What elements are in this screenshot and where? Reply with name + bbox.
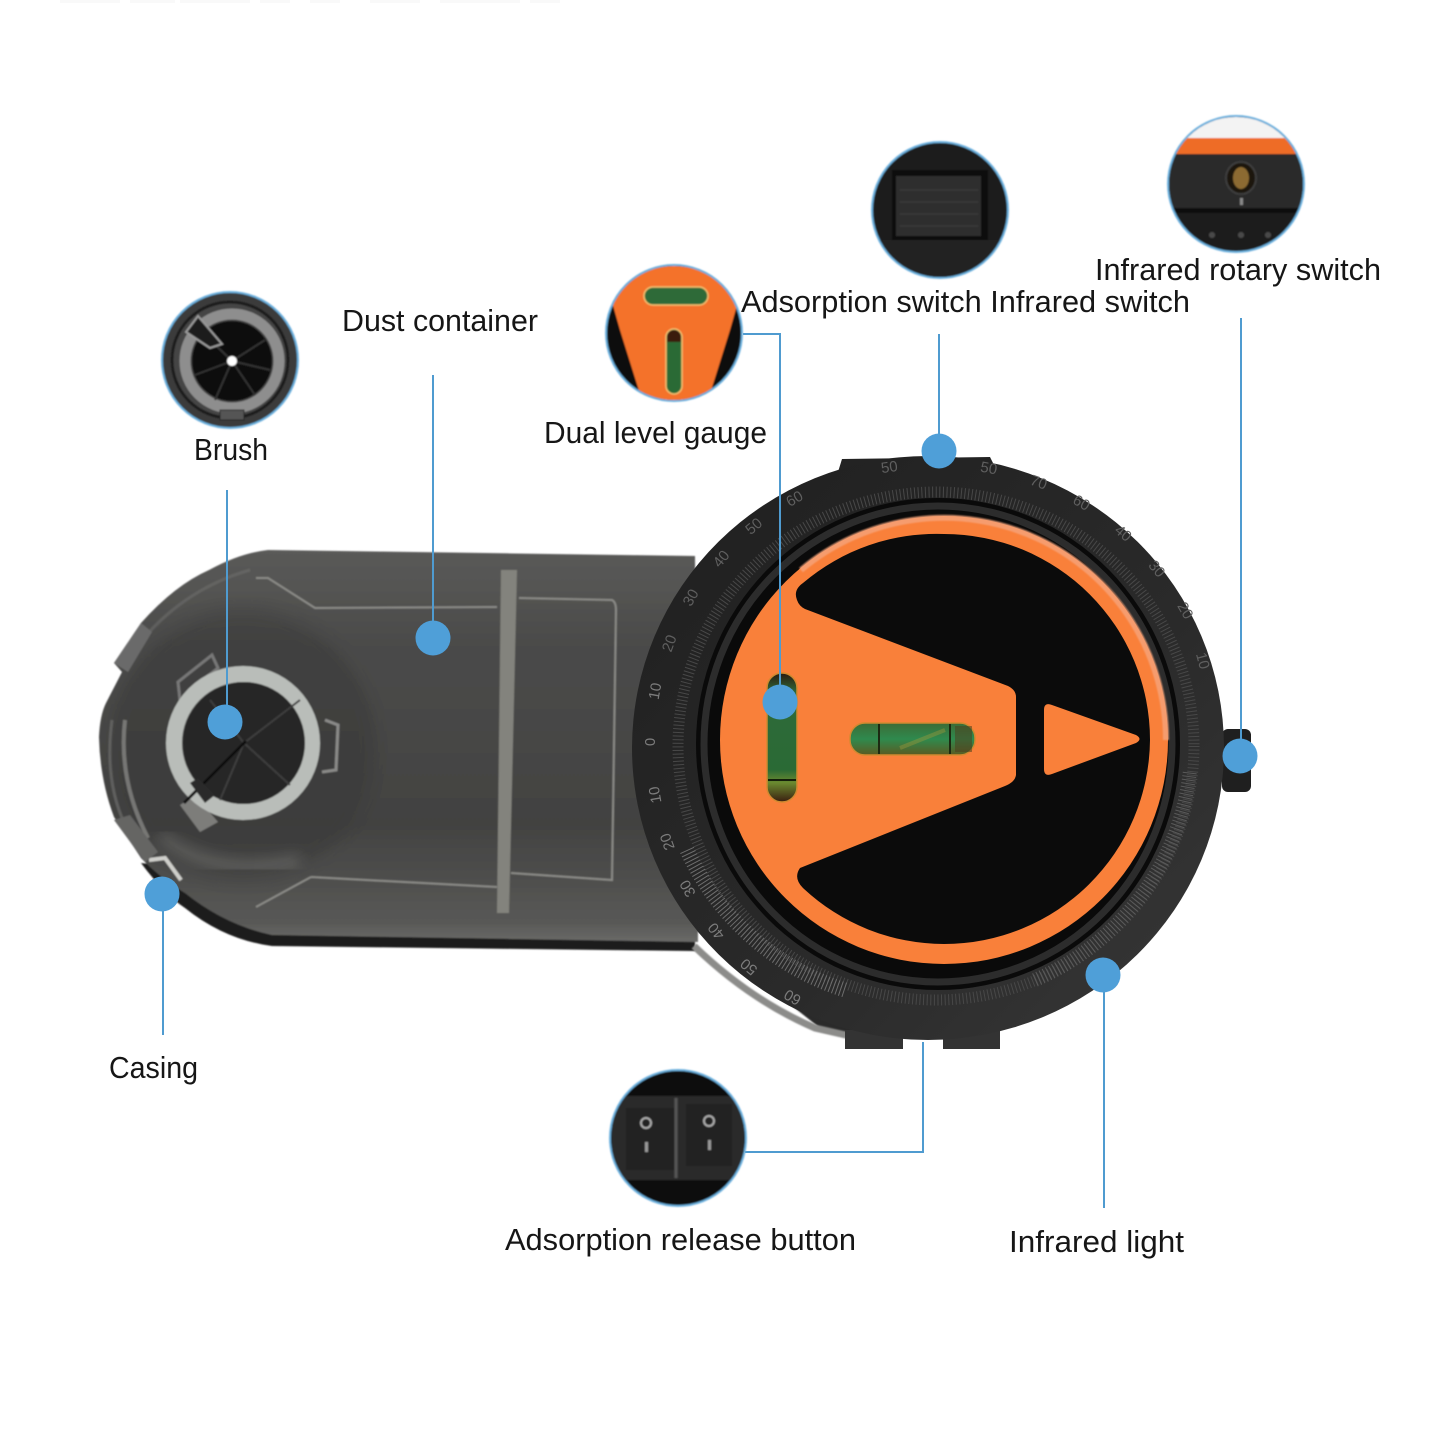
brush socket [178, 655, 218, 700]
product: drill dust collector and laser level [99, 456, 1251, 1049]
scale numbers: 50 [737, 955, 761, 978]
vertical ridge [497, 570, 517, 913]
detail circle: infrared rotary switch [1165, 115, 1310, 252]
scale numbers: 60 [783, 488, 806, 511]
scale numbers [642, 458, 1213, 1008]
label: Infrared rotary switch: Infrared rotary switch [1095, 252, 1381, 287]
moulded tabs on the casing [114, 623, 152, 672]
scale numbers: 50 [979, 459, 998, 478]
scale numbers: 40 [710, 547, 733, 571]
label: Adsorption switch Infrared switch: Adsorption switch Infrared switch [741, 284, 1190, 319]
dust container casing [99, 550, 870, 1040]
raised outline on the container [256, 578, 616, 907]
scale numbers: 10 [646, 785, 665, 804]
label: Brush: Brush [194, 432, 268, 467]
scale numbers: 40 [705, 919, 728, 943]
scale numbers: 30 [677, 877, 700, 900]
faint cropped text at top [60, 0, 560, 3]
label: Dust container: Dust container [342, 303, 538, 338]
black dial face [796, 534, 1150, 944]
detail circle: adsorption release button [610, 1070, 746, 1206]
scale numbers: 10 [646, 682, 665, 701]
detail circle: dual level gauge [604, 263, 744, 403]
scale numbers: 30 [1145, 557, 1168, 581]
orange dial [720, 516, 1168, 964]
inner dark rim [696, 498, 1180, 990]
scale numbers: 20 [659, 633, 681, 654]
bottom button tabs [845, 1030, 1000, 1049]
leader lines [163, 318, 1241, 1208]
scale numbers: 60 [1070, 492, 1093, 515]
scale numbers: 20 [657, 831, 679, 852]
lower body wedge with light edge [694, 946, 850, 1036]
clear cap shading [120, 618, 366, 874]
scale numbers: 0 [642, 738, 659, 746]
scale numbers: 50 [742, 515, 766, 538]
scale numbers: 40 [1111, 522, 1135, 545]
label: Dual level gauge: Dual level gauge [544, 415, 767, 450]
scale numbers: 20 [1173, 599, 1196, 622]
scale numbers: 30 [680, 586, 703, 609]
dark casing backing [141, 863, 695, 951]
label: Casing: Casing [109, 1050, 198, 1085]
scale numbers: 50 [880, 458, 899, 477]
orange arrow marker [1044, 704, 1140, 775]
scale numbers: 10 [1192, 651, 1213, 671]
callout dots [144, 434, 1258, 992]
scale numbers: 70 [1028, 472, 1049, 494]
vertical bubble vial [767, 673, 797, 802]
label: Adsorption release button: Adsorption release button [505, 1222, 856, 1257]
top tab of protractor ring [838, 457, 1000, 477]
detail circle: brush [162, 292, 298, 428]
horizontal bubble vial [850, 723, 975, 755]
scale numbers: 60 [781, 985, 804, 1008]
right-hand rotary knob [1222, 729, 1251, 792]
protractor ring [632, 456, 1224, 1040]
label: Infrared light: Infrared light [1009, 1224, 1184, 1259]
detail circle: adsorption switch [870, 142, 1010, 280]
